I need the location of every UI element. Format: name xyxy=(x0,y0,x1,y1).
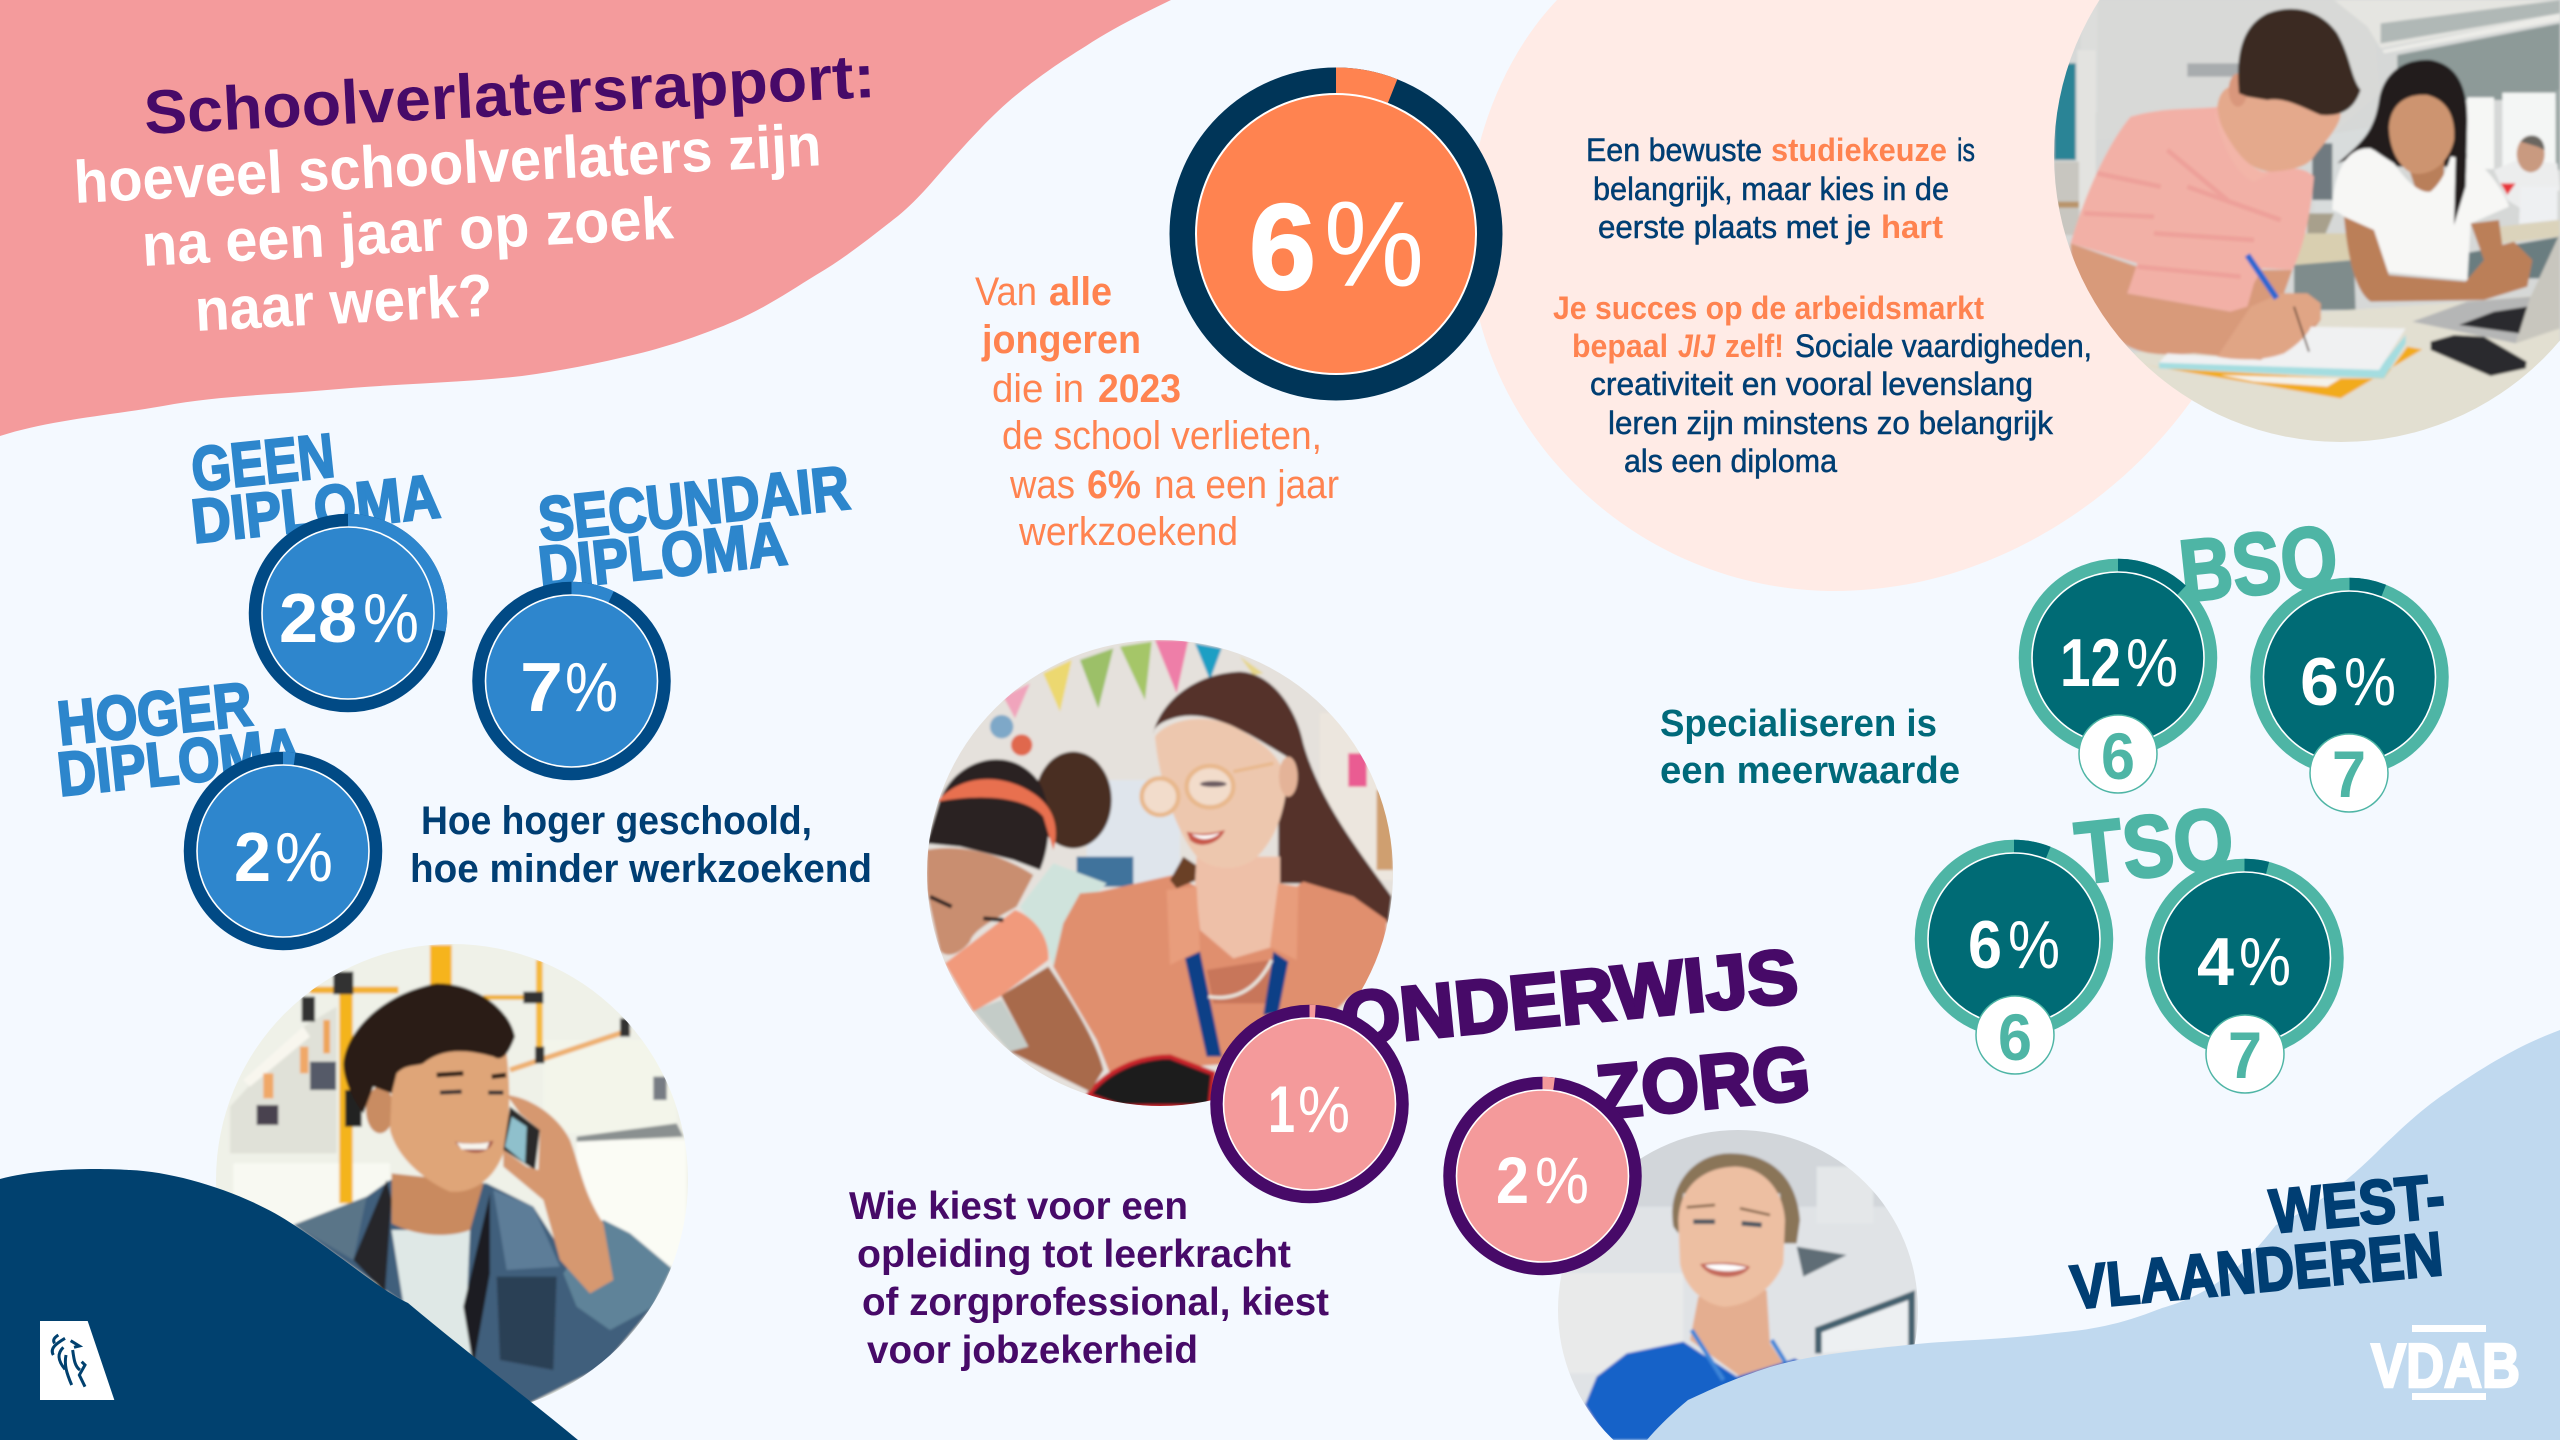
text: van alle jongeren: jongeren xyxy=(981,318,1141,362)
donut: TSO niveau 6 6%: 6 xyxy=(1968,907,2002,983)
text: studiekeuze advice: Sociale vaardigheden, xyxy=(1795,328,2092,364)
text: studiekeuze advice: hart xyxy=(1881,209,1943,245)
jacket xyxy=(293,1180,672,1405)
text: van alle jongeren: die in xyxy=(992,367,1084,411)
title: hoeveel schoolverlaters zijn xyxy=(72,111,823,216)
pink title blob xyxy=(0,0,1171,436)
donut: BSO niveau 6 12%: % xyxy=(2126,625,2178,701)
badge: 7: 7 xyxy=(2332,737,2366,811)
donut: BSO niveau 6 12% xyxy=(2026,566,2210,793)
logo: VDAB: VDAB xyxy=(2371,1332,2520,1401)
label: Secundair diploma: SECUNDAIR xyxy=(535,454,853,555)
badge: 6 xyxy=(2079,715,2157,793)
donut: secundair diploma 7%: 7 xyxy=(520,648,563,726)
donut: geen diploma 28%: % xyxy=(363,579,419,657)
donut: hoger diploma 2% xyxy=(190,758,376,944)
girl xyxy=(2337,58,2469,168)
boy xyxy=(2071,243,2321,360)
text: studiekeuze advice: Je succes op de arbeidsmarkt xyxy=(1553,290,1984,326)
text: studiekeuze advice: studiekeuze xyxy=(1771,132,1947,168)
donut: 6% of all school leavers: 6 xyxy=(1249,179,1316,315)
title: Schoolverlatersrapport: xyxy=(142,42,877,148)
back child xyxy=(1020,863,1107,967)
text: studiekeuze advice: zelf! xyxy=(1725,328,1784,364)
label: Secundair diploma xyxy=(535,454,853,604)
navy corner shape xyxy=(0,1169,578,1440)
badge: 6: 6 xyxy=(1998,1000,2032,1074)
text: studiekeuze advice: Een bewuste xyxy=(1586,132,1762,168)
text: van alle jongeren: alle xyxy=(1049,270,1112,314)
label: zorg: ZORG xyxy=(1592,1030,1814,1136)
label: West-Vlaanderen: WEST- xyxy=(2267,1162,2448,1247)
logo: Flemish lion xyxy=(40,1321,114,1400)
donut: TSO niveau 7 4% xyxy=(2152,866,2337,1093)
phone and hand xyxy=(503,1107,540,1170)
donut: hoger diploma 2%: % xyxy=(275,818,333,896)
laptop xyxy=(2412,297,2531,343)
text: hoe hoger geschoold xyxy=(410,799,872,891)
text: van alle jongeren: was xyxy=(1009,463,1075,507)
text: van alle jongeren: 2023 xyxy=(1098,367,1181,411)
teacher xyxy=(1153,672,1392,923)
panel: peach text circle xyxy=(1468,0,2340,591)
badge: 7: 7 xyxy=(2228,1018,2262,1092)
label: BSO: BSO xyxy=(2175,506,2342,621)
badge: 7 xyxy=(2206,1015,2284,1093)
donut: geen diploma 28% xyxy=(256,520,440,706)
badge: 6: 6 xyxy=(2101,719,2135,793)
label: Geen diploma: GEEN xyxy=(188,421,338,505)
donut: 6% of all school leavers: % xyxy=(1324,176,1424,312)
text: wie kiest voor een opleiding: Wie kiest voor een xyxy=(849,1185,1188,1228)
donut: TSO niveau 6 6%: % xyxy=(2008,907,2060,983)
text: specialiseren is een meerwaarde xyxy=(1660,703,1960,792)
donut: BSO niveau 6 12%: 12 xyxy=(2060,625,2121,701)
text: studiekeuze advice: creativiteit en vooral levenslang xyxy=(1590,366,2033,402)
text: van alle jongeren xyxy=(975,270,1339,554)
donut: zorg 2%: % xyxy=(1535,1143,1589,1217)
text: van alle jongeren: 6% xyxy=(1087,463,1141,507)
text: studiekeuze advice: JIJ xyxy=(1678,328,1716,364)
donut: BSO niveau 7 6%: % xyxy=(2344,644,2396,720)
title: naar werk? xyxy=(193,261,494,344)
donut: BSO niveau 7 6%: 6 xyxy=(2300,644,2339,720)
text: studiekeuze advice: eerste plaats met je xyxy=(1598,209,1871,245)
label: West-Vlaanderen xyxy=(2068,1162,2448,1323)
bag xyxy=(1088,1057,1213,1107)
text: van alle jongeren: de school verlieten, xyxy=(1002,414,1322,458)
badge: 6 xyxy=(1976,996,2054,1074)
table xyxy=(2134,303,2560,442)
donut: onderwijs 1%: 1 xyxy=(1268,1072,1295,1146)
photo: teacher and child xyxy=(920,630,1400,1110)
label: Secundair diploma: DIPLOMA xyxy=(535,509,790,604)
donut: hoger diploma 2%: 2 xyxy=(234,818,271,896)
label: onderwijs: ONDERWIJS xyxy=(1337,934,1801,1063)
label: West-Vlaanderen: VLAANDEREN xyxy=(2068,1220,2446,1323)
text: hoe hoger geschoold: hoe minder werkzoekend xyxy=(410,847,872,891)
photo: smiling nurse xyxy=(1550,1120,1930,1440)
text: specialiseren is een meerwaarde: Specialiseren is xyxy=(1660,703,1937,745)
donut: onderwijs 1% xyxy=(1217,1012,1402,1196)
donut: 6% of all school leavers xyxy=(1183,81,1489,387)
text: studiekeuze advice xyxy=(1553,132,2092,479)
text: wie kiest voor een opleiding: opleiding tot leerkracht xyxy=(857,1233,1291,1276)
donut: TSO niveau 7 4%: 4 xyxy=(2197,924,2234,1000)
label: Hoger diploma: HOGER xyxy=(54,670,255,759)
back man xyxy=(2494,160,2560,208)
text: hoe hoger geschoold: Hoe hoger geschoold, xyxy=(421,799,812,843)
text: wie kiest voor een opleiding xyxy=(849,1185,1329,1372)
photo: young man on the phone xyxy=(210,940,700,1430)
donut: TSO niveau 6 6% xyxy=(1922,846,2106,1074)
folder and notebook xyxy=(2140,347,2422,398)
label: TSO: TSO xyxy=(2071,788,2238,903)
text: van alle jongeren: werkzoekend xyxy=(1018,510,1238,554)
donut: geen diploma 28%: 28 xyxy=(279,579,357,657)
calculator xyxy=(2431,335,2527,376)
light blue corner shape xyxy=(1647,1030,2560,1440)
label: Geen diploma xyxy=(188,421,443,557)
donut: zorg 2% xyxy=(1450,1084,1635,1268)
label: Hoger diploma: DIPLOMA xyxy=(54,716,305,810)
title: na een jaar op zoek xyxy=(140,184,676,279)
head xyxy=(366,1087,394,1133)
text: van alle jongeren: na een jaar xyxy=(1154,463,1339,507)
donut: secundair diploma 7% xyxy=(479,588,664,774)
donut: TSO niveau 7 4%: % xyxy=(2239,924,2291,1000)
donut: onderwijs 1%: % xyxy=(1298,1072,1350,1146)
text: wie kiest voor een opleiding: voor jobzekerheid xyxy=(867,1329,1198,1372)
label: Geen diploma: DIPLOMA xyxy=(188,462,443,557)
text: studiekeuze advice: bepaal xyxy=(1572,328,1668,364)
text: studiekeuze advice: belangrijk, maar kies in de xyxy=(1593,171,1949,207)
child xyxy=(973,1000,1028,1052)
donut: BSO niveau 7 6% xyxy=(2257,584,2442,812)
label: Hoger diploma xyxy=(54,670,305,810)
donut: zorg 2%: 2 xyxy=(1496,1143,1529,1217)
text: van alle jongeren: Van xyxy=(975,270,1037,314)
badge: 7 xyxy=(2310,734,2388,812)
title xyxy=(72,42,877,344)
text: specialiseren is een meerwaarde: een meerwaarde xyxy=(1660,750,1960,792)
text: wie kiest voor een opleiding: of zorgprofessional, kiest xyxy=(862,1281,1329,1324)
donut: secundair diploma 7%: % xyxy=(565,648,618,726)
text: studiekeuze advice: als een diploma xyxy=(1624,443,1837,479)
text: studiekeuze advice: is xyxy=(1957,132,1975,168)
photo: students studying xyxy=(2051,0,2560,453)
text: studiekeuze advice: leren zijn minstens zo belangrijk xyxy=(1608,405,2054,441)
